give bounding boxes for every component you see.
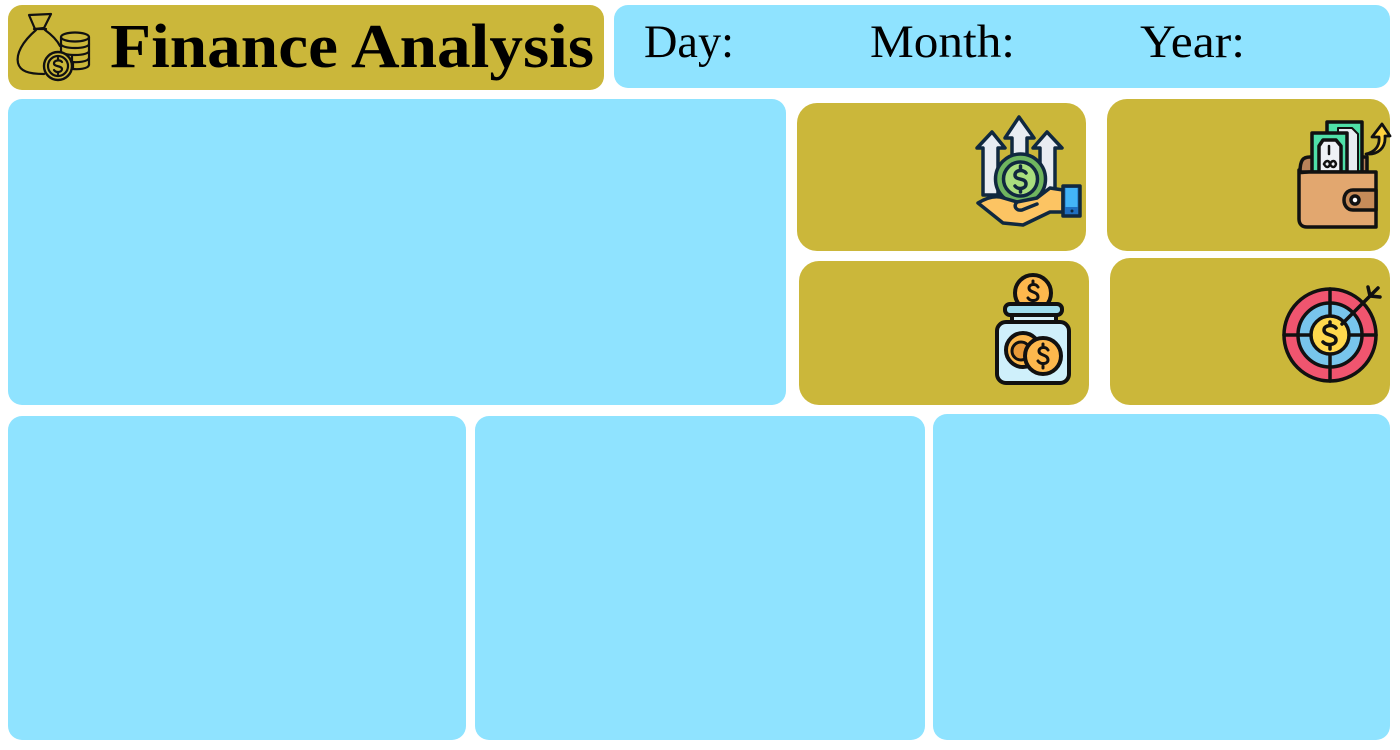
- heading: Finance Analysis: Finance Analysis: [110, 13, 594, 81]
- label: month: Month:: [870, 16, 1015, 68]
- icon: dollar target with arrow: [1284, 287, 1380, 381]
- panel: savings card: [799, 261, 1089, 405]
- panel: title banner: [8, 5, 604, 90]
- panel: large chart area: [8, 99, 786, 405]
- panel: date: [614, 5, 1390, 88]
- panel: bottom left: [8, 416, 466, 740]
- panel: income card: [797, 103, 1086, 251]
- icon: coin jar: [997, 275, 1069, 383]
- panel: goals card: [1110, 258, 1390, 405]
- panel: bottom right: [933, 414, 1390, 740]
- icon: wallet with banknotes: [1299, 122, 1390, 227]
- icon: money bag and coins: [18, 14, 89, 80]
- label: day: Day:: [644, 16, 734, 68]
- label: year: Year:: [1140, 16, 1245, 68]
- panel: wallet card: [1107, 99, 1390, 251]
- panel: bottom centre: [475, 416, 925, 740]
- icon: hand holding coin with rising arrows: [977, 117, 1080, 225]
